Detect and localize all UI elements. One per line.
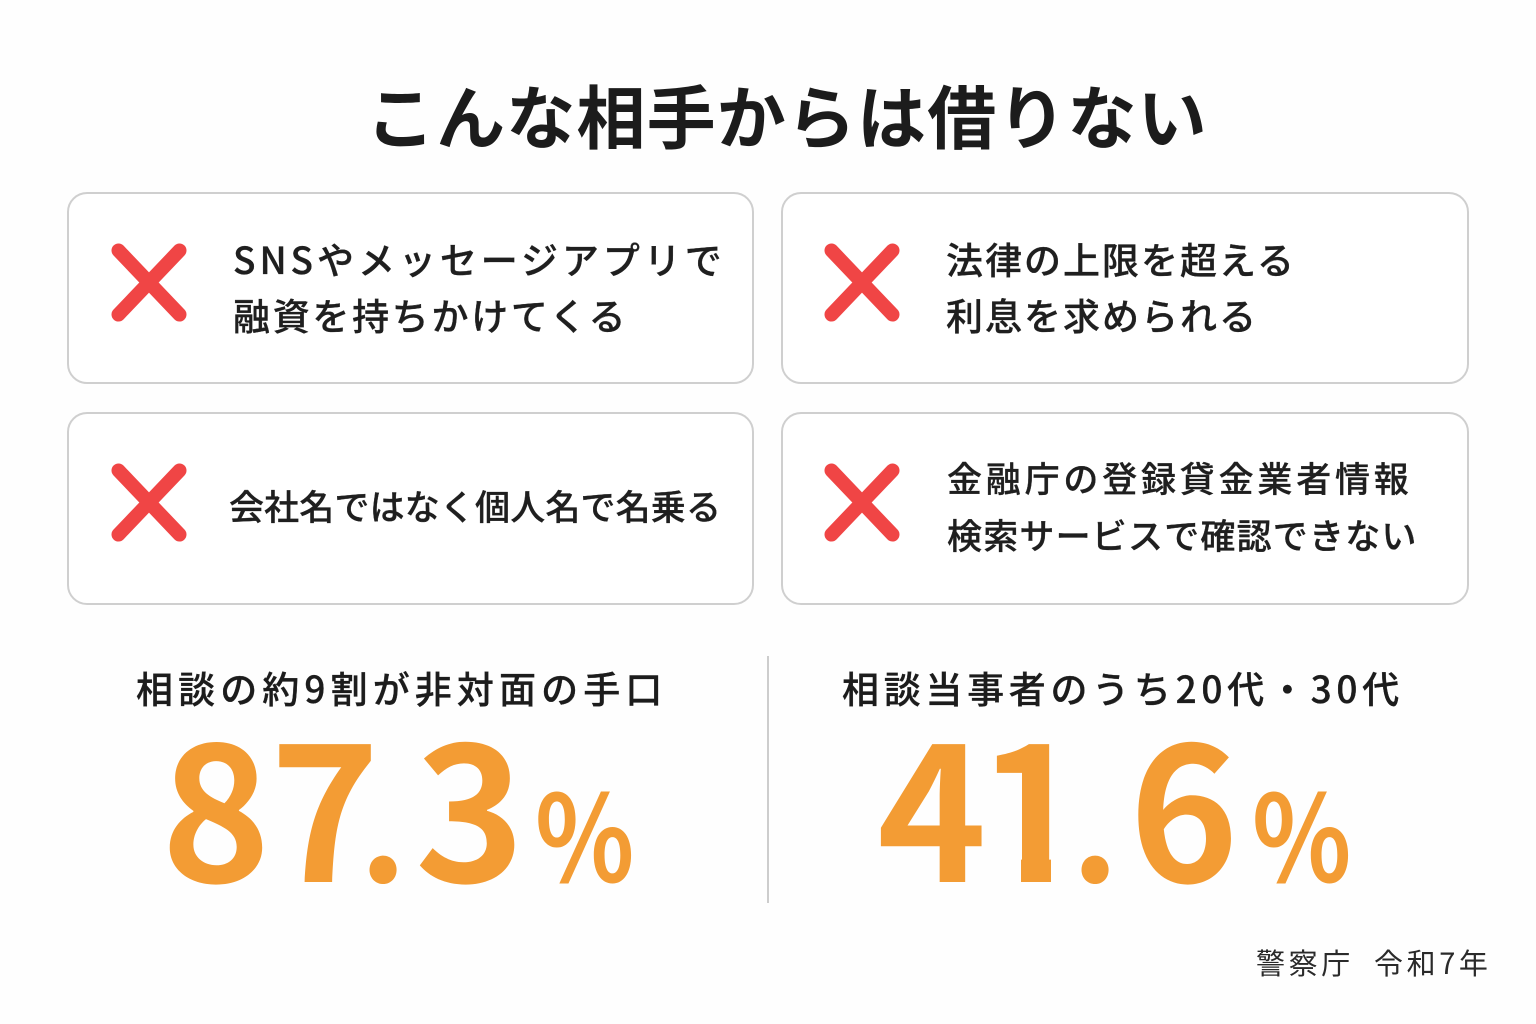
source note: 警察庁 令和7年 [1256,941,1492,983]
stat value [877,666,1351,936]
stat caption: 相談の約9割が非対面の手口 [136,660,667,714]
icon: red cross [112,244,186,322]
stat value: 6 [1129,666,1239,936]
stat value: 4 [877,666,987,936]
panel: SNS warning [67,192,754,384]
panel: interest warning [781,192,1469,384]
warning text: SNSやメッセージアプリで [233,231,726,285]
stat value: 8 [161,666,271,936]
title: こんな相手からは借りない [366,63,1208,163]
statistic: twenties and thirties [842,660,1404,936]
icon: red cross [824,464,900,542]
warning text: 会社名ではなく個人名で名乗る [229,480,721,531]
panel: registry warning [781,412,1469,605]
stat value: . [1071,710,1119,924]
warning text [233,231,726,341]
stat value [161,666,634,936]
stat value: 3 [415,666,525,936]
stat value: 1 [977,666,1087,936]
warning text: 法律の上限を超える [946,231,1296,285]
stat value: % [1252,743,1351,917]
warning text: 検索サービスで確認できない [947,509,1418,560]
warning text: 利息を求められる [946,287,1258,341]
icon: red cross [112,464,186,542]
warning text: 融資を持ちかけてくる [233,287,628,341]
warning text [947,452,1418,560]
divider [767,656,769,903]
stat value: % [535,743,634,917]
stat value: . [359,710,407,924]
statistic: non face-to-face [136,660,667,936]
warning text: 金融庁の登録貸金業者情報 [947,452,1413,503]
stat value: 7 [270,666,380,936]
icon: red cross [824,244,900,322]
warning text [946,231,1296,341]
panel: individual name warning [67,412,754,605]
stat caption: 相談当事者のうち20代・30代 [842,660,1404,714]
